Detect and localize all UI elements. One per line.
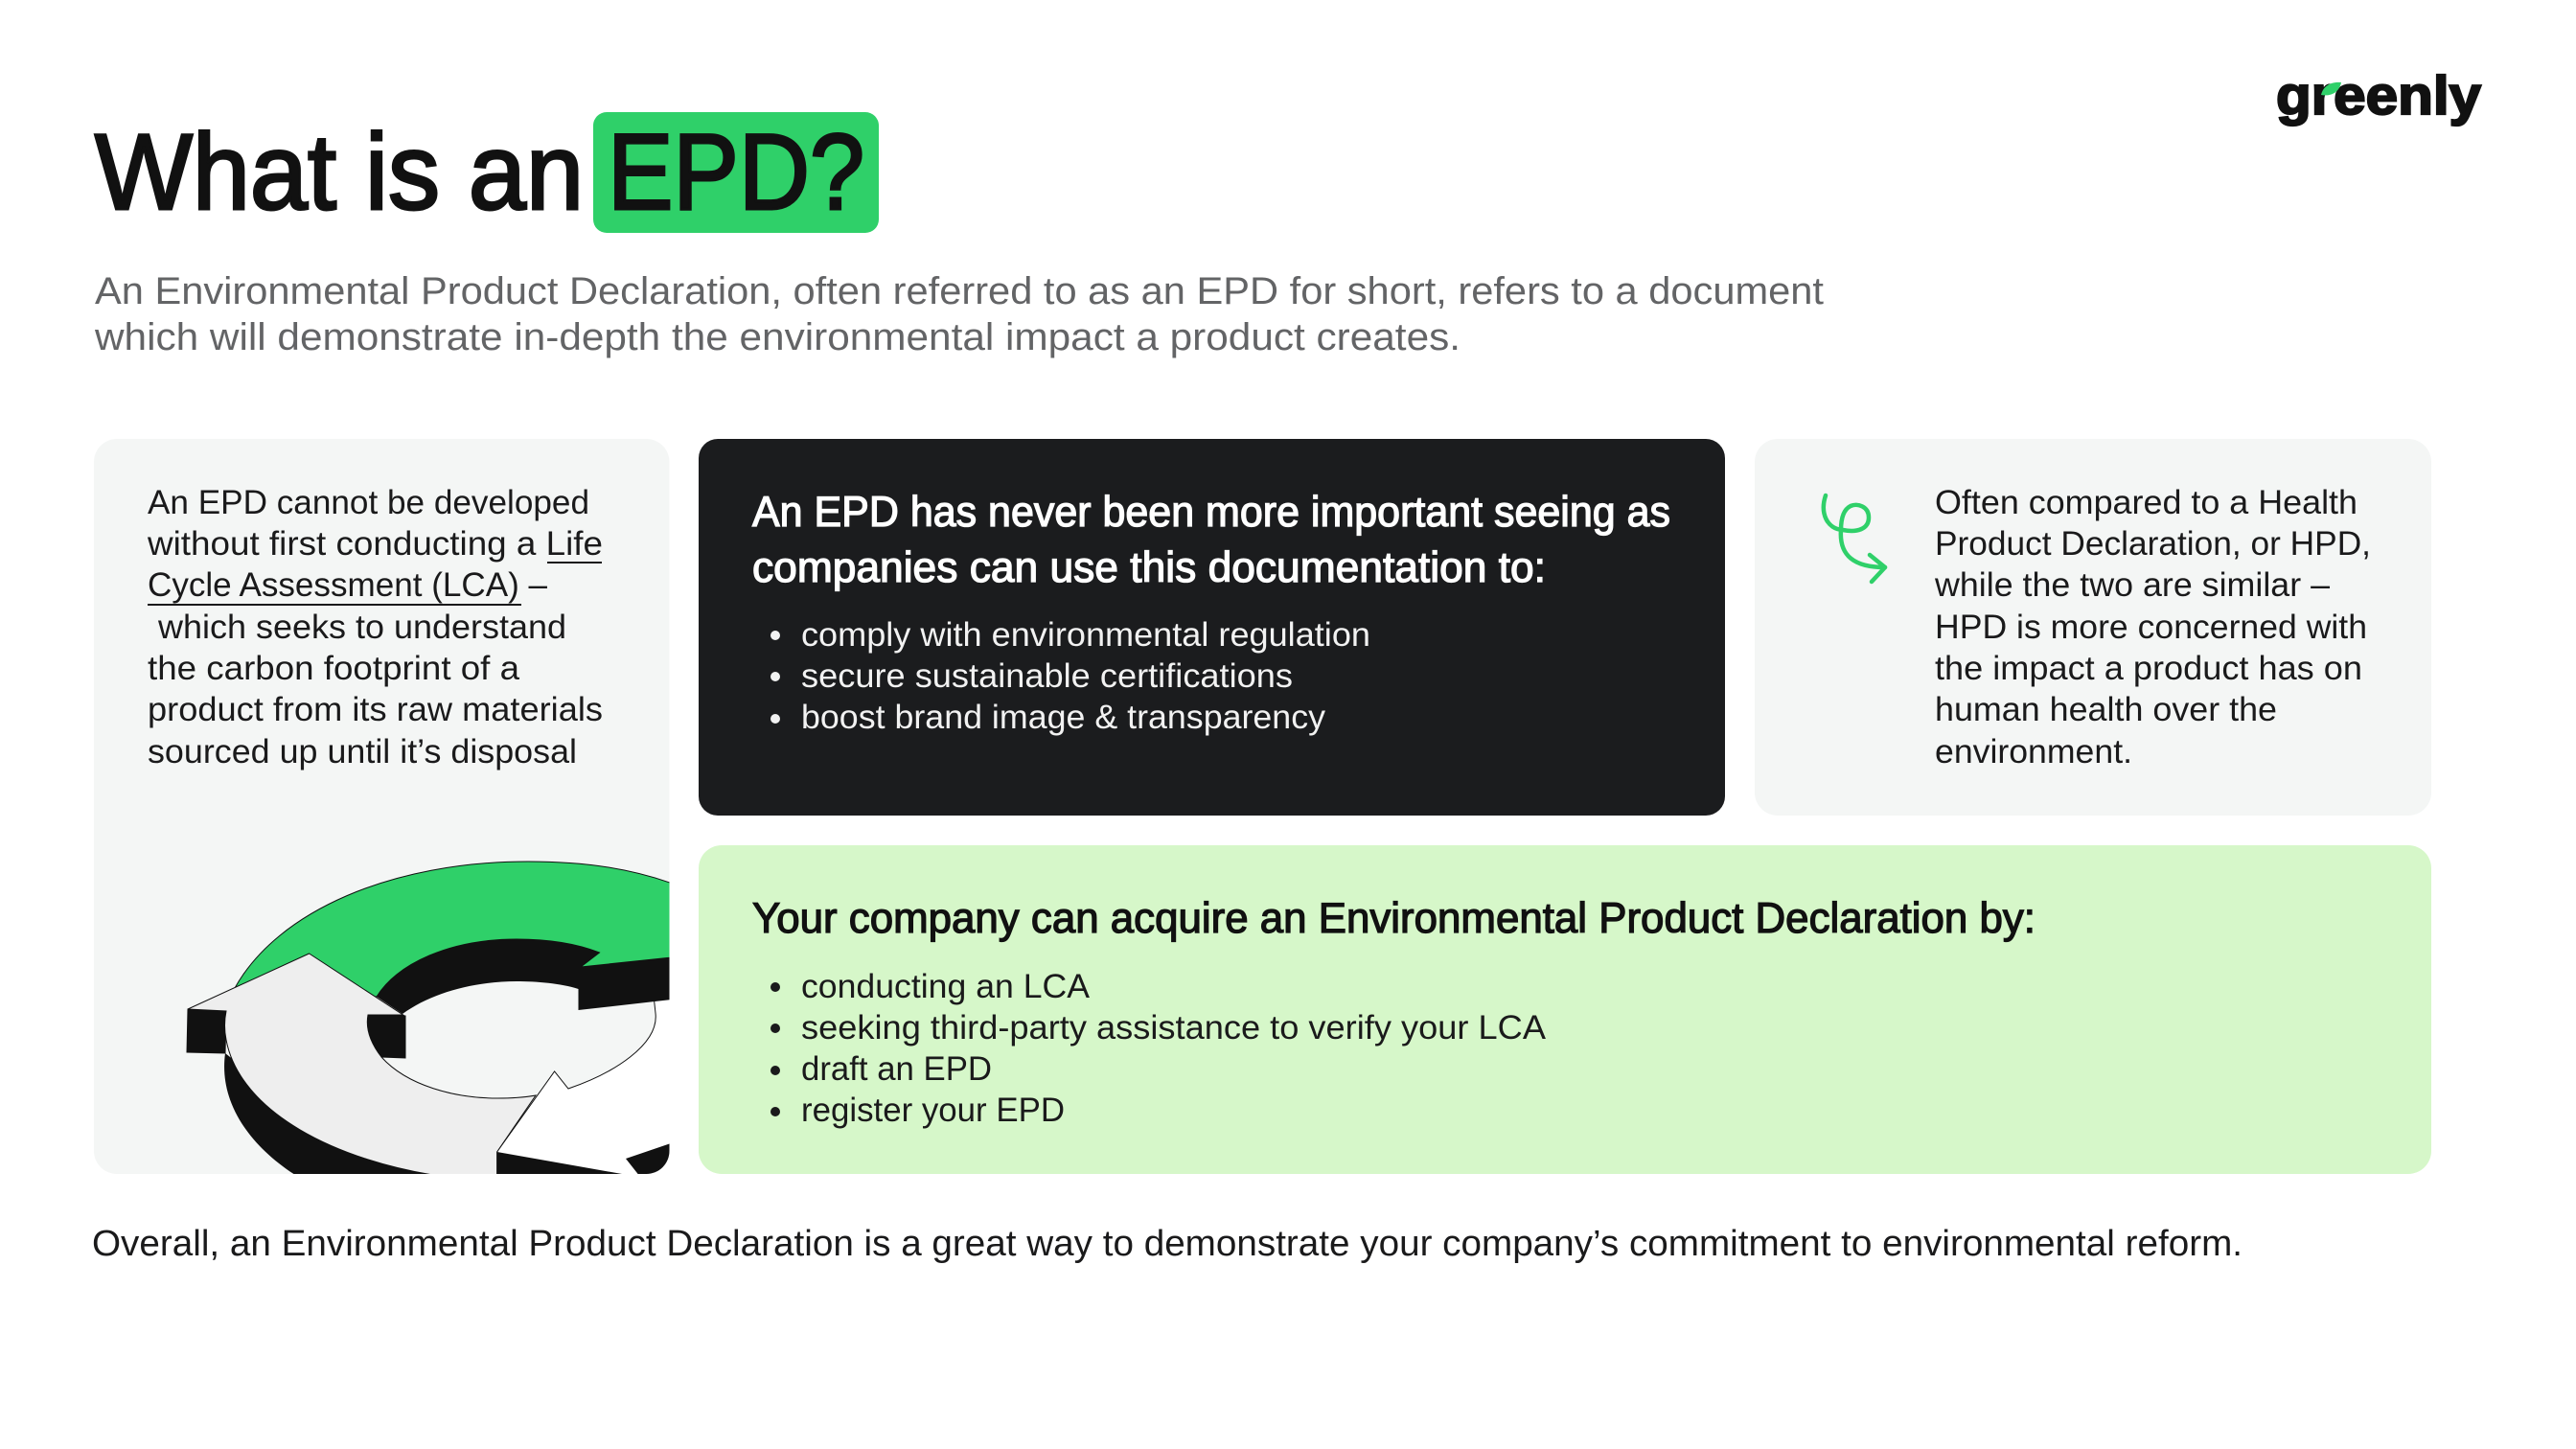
acquire bullets: conducting an LCA (801, 967, 1090, 1005)
LCA text block: the carbon footprint of a (148, 649, 519, 687)
importance bullets: boost brand image & transparency (801, 698, 1325, 736)
title text: What is an (95, 112, 584, 232)
importance heading: An EPD has never been more important seeing as (752, 489, 1670, 536)
acquire bullets: draft an EPD (801, 1049, 992, 1088)
LCA text block: Cycle Assessment (LCA) – (148, 565, 547, 604)
green arrow (235, 862, 680, 997)
black underside of light arrow (224, 1054, 425, 1174)
LCA text block: An EPD cannot be developed (148, 483, 589, 521)
panel: how to acquire an EPD (699, 845, 2431, 1174)
LCA text block (147, 483, 603, 770)
HPD text block: Often compared to a Health (1935, 483, 2358, 521)
subtitle: which will demonstrate in-depth the environmental impact a product creates. (94, 316, 1460, 358)
importance heading (752, 489, 1670, 591)
white arrow (497, 1000, 669, 1174)
HPD text block: while the two are similar – (1934, 565, 2330, 604)
icon: curly arrow (1824, 495, 1885, 582)
black wedge right (626, 1144, 669, 1174)
acquire bullets (770, 967, 1546, 1129)
HPD text block: the impact a product has on (1935, 649, 2362, 687)
panel: HPD comparison (1755, 439, 2431, 816)
subtitle: An Environmental Product Declaration, often referred to as an EPD for short, refers to a document (95, 270, 1824, 312)
HPD text block: environment. (1935, 732, 2132, 770)
HPD text block: HPD is more concerned with (1935, 608, 2367, 646)
importance heading: companies can use this documentation to: (752, 544, 1546, 591)
acquire bullets: seeking third-party assistance to verify your LCA (801, 1008, 1546, 1046)
LCA text block: without first conducting a Life (147, 524, 603, 563)
light arrow (188, 954, 536, 1177)
panel: importance of EPD (699, 439, 1725, 816)
illustration: circular arrows (187, 862, 680, 1184)
black block right (368, 1015, 405, 1058)
HPD text block: human health over the (1935, 690, 2277, 728)
importance bullets: secure sustainable certifications (801, 656, 1293, 695)
LCA text block: which seeks to understand (157, 608, 566, 646)
panel: LCA explanation (94, 439, 680, 1184)
HPD text block (1934, 483, 2371, 770)
LCA text block: product from its raw materials (148, 690, 603, 728)
black wedge under white arrow (497, 1152, 622, 1174)
closing statement: Overall, an Environmental Product Declaration is a great way to demonstrate your company’s commitment to environmental reform. (92, 1224, 2242, 1264)
black block left (187, 1009, 226, 1053)
acquire heading: Your company can acquire an Environmental Product Declaration by: (752, 895, 2036, 942)
importance bullets: comply with environmental regulation (801, 615, 1370, 654)
title highlight: EPD: EPD? (608, 112, 864, 232)
logo: greenly: greenly (2276, 65, 2481, 126)
subtitle (94, 270, 1824, 358)
HPD text block: Product Declaration, or HPD, (1935, 524, 2371, 563)
LCA text block: sourced up until it’s disposal (148, 732, 577, 770)
black band under green arrow (377, 939, 680, 1014)
title (95, 112, 879, 233)
importance bullets (770, 615, 1370, 736)
acquire bullets: register your EPD (801, 1091, 1065, 1129)
